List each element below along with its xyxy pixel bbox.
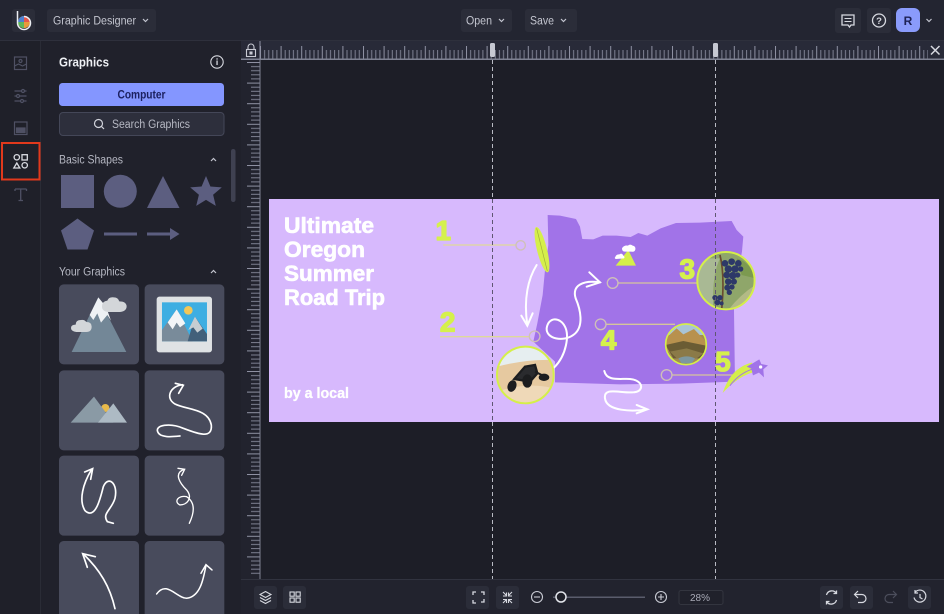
mountain icon bbox=[615, 245, 636, 266]
icon: adjustments tool bbox=[14, 90, 26, 102]
icon: redo bbox=[885, 591, 896, 602]
search graphics button: Search Graphics bbox=[112, 119, 190, 131]
thumbnail: mountain with clouds bbox=[59, 284, 139, 364]
banner byline: by a local bbox=[284, 386, 349, 402]
search graphics button bbox=[60, 112, 224, 136]
marker line 2 bbox=[440, 331, 540, 342]
bottom toolbar bbox=[241, 579, 944, 614]
user avatar bbox=[896, 8, 932, 32]
thumbnail: curved up arrow bbox=[59, 541, 139, 614]
banner title: Ultimate bbox=[284, 213, 374, 238]
zoom percentage: 28% bbox=[690, 593, 710, 604]
computer upload button: Computer bbox=[118, 90, 166, 102]
app logo bbox=[12, 9, 35, 32]
icon: refresh bbox=[820, 586, 843, 609]
number 5: 5 bbox=[715, 346, 731, 377]
marker line 4 bbox=[595, 319, 675, 330]
number 1: 1 bbox=[436, 215, 451, 246]
open menu bbox=[461, 9, 512, 32]
number 4: 4 bbox=[601, 324, 617, 355]
graphics panel bbox=[41, 41, 241, 614]
left ruler bbox=[241, 60, 260, 579]
icon: layers button bbox=[254, 586, 277, 609]
zoom percentage bbox=[679, 590, 723, 604]
left icon rail bbox=[0, 41, 41, 614]
photo: rock canyon bbox=[665, 323, 707, 365]
thumbnail: picture frame bbox=[145, 284, 224, 364]
icon: graphics shapes bbox=[14, 155, 27, 168]
computer upload button bbox=[59, 83, 224, 106]
banner title: Road Trip bbox=[284, 285, 385, 310]
icon: text tool bbox=[15, 189, 26, 200]
your graphics heading: Your Graphics bbox=[59, 266, 125, 278]
thumbnail: squiggle up arrow bbox=[59, 456, 139, 536]
icon: lock bbox=[246, 44, 256, 56]
guide handle left bbox=[490, 43, 495, 57]
panel heading: Graphics bbox=[59, 54, 109, 70]
top toolbar bbox=[0, 0, 944, 41]
icon: layout tool bbox=[14, 122, 27, 134]
product dropdown bbox=[47, 9, 156, 32]
thumbnail: thin loop arrow bbox=[145, 456, 224, 536]
open menu: Open bbox=[466, 16, 492, 28]
save menu bbox=[525, 9, 577, 32]
user avatar: R bbox=[904, 14, 913, 28]
icon: help: ? bbox=[876, 16, 882, 27]
oregon map bbox=[533, 215, 743, 384]
icon: help bbox=[867, 8, 891, 33]
icon: image tool bbox=[14, 57, 26, 70]
zoom slider bbox=[532, 592, 666, 602]
icon: fit to screen bbox=[466, 586, 489, 609]
banner title: Oregon bbox=[284, 237, 365, 262]
thumbnail: looped route arrow bbox=[145, 370, 224, 450]
top ruler bbox=[241, 41, 944, 60]
scrollbar bbox=[231, 149, 236, 202]
photo: grapes bbox=[697, 252, 755, 310]
number 3: 3 bbox=[680, 253, 695, 284]
save menu: Save bbox=[530, 16, 554, 28]
basic shapes set bbox=[61, 175, 222, 250]
shooting star bbox=[723, 359, 768, 393]
guide handle right bbox=[713, 43, 718, 57]
route arrow 1 bbox=[521, 265, 537, 326]
icon: info bbox=[211, 56, 223, 68]
marker line 3 bbox=[607, 278, 698, 288]
banner title bbox=[284, 213, 385, 310]
marker line 1 bbox=[443, 241, 525, 250]
thumbnail: mountains with sun bbox=[59, 370, 139, 450]
icon: comments bbox=[835, 8, 861, 33]
thumbnail: wave arrow bbox=[145, 541, 224, 614]
marker line 5 bbox=[661, 370, 735, 380]
number 2: 2 bbox=[440, 307, 455, 338]
banner title: Summer bbox=[284, 261, 374, 286]
icon: history bbox=[908, 586, 931, 609]
surfboard bbox=[531, 226, 552, 274]
icon: grid button bbox=[283, 586, 306, 609]
icon: undo bbox=[850, 586, 873, 609]
selected graphics tool highlight bbox=[2, 143, 40, 180]
product dropdown: Graphic Designer bbox=[53, 16, 136, 28]
guide line left bbox=[492, 60, 494, 579]
route arrow 2 bbox=[547, 272, 600, 367]
banner design canvas bbox=[269, 199, 939, 422]
icon: close rulers bbox=[931, 46, 940, 54]
photo: dune buggy bbox=[497, 347, 554, 404]
icon: shrink to fit bbox=[496, 586, 519, 609]
guide line right bbox=[714, 60, 716, 579]
basic shapes heading: Basic Shapes bbox=[59, 154, 123, 166]
graphics thumbnails grid bbox=[59, 284, 224, 614]
route arrow 3 bbox=[604, 371, 647, 413]
